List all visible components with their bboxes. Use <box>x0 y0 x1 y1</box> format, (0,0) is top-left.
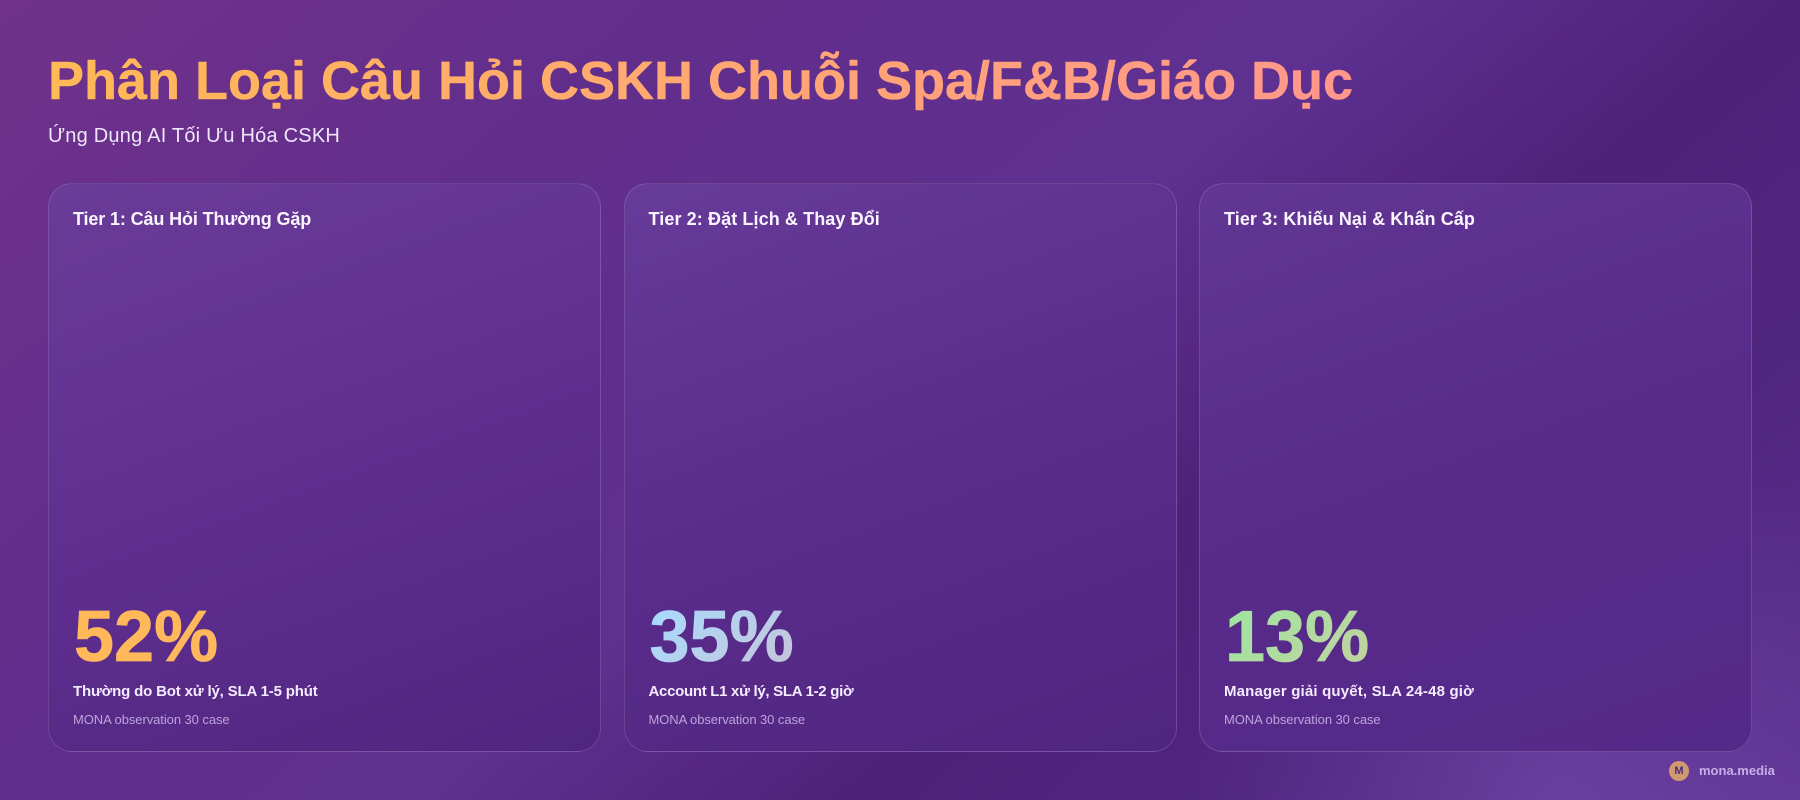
panel: tier 1 <box>48 183 601 752</box>
tier 1 percentage: 52% <box>74 597 218 677</box>
tier 3 source note: MONA observation 30 case <box>1224 712 1381 727</box>
tier 1 heading: Tier 1: Câu Hỏi Thường Gặp <box>73 209 311 229</box>
tier 3 percentage: 13% <box>1225 597 1369 677</box>
icon: brand logo <box>1669 761 1689 781</box>
tier 2 description: Account L1 xử lý, SLA 1-2 giờ <box>648 683 853 700</box>
panel: tier 2 <box>624 183 1176 752</box>
title: Phân Loại Câu Hỏi CSKH Chuỗi Spa/F&B/Giáo Dục <box>48 51 1353 111</box>
tier 3 description: Manager giải quyết, SLA 24-48 giờ <box>1224 683 1474 700</box>
tier 2 heading: Tier 2: Đặt Lịch & Thay Đổi <box>648 209 880 229</box>
panel: tier 3 <box>1199 183 1752 752</box>
tier 3 heading: Tier 3: Khiếu Nại & Khẩn Cấp <box>1224 209 1475 229</box>
brand name: mona.media <box>1699 763 1775 778</box>
icon: brand logo: M <box>1674 765 1684 777</box>
tier 1 source note: MONA observation 30 case <box>73 712 230 727</box>
tier 2 source note: MONA observation 30 case <box>648 712 805 727</box>
brand footer <box>1669 761 1775 781</box>
subtitle: Ứng Dụng AI Tối Ưu Hóa CSKH <box>48 125 340 147</box>
tier 2 percentage: 35% <box>650 597 794 677</box>
tier 1 description: Thường do Bot xử lý, SLA 1-5 phút <box>73 683 318 700</box>
